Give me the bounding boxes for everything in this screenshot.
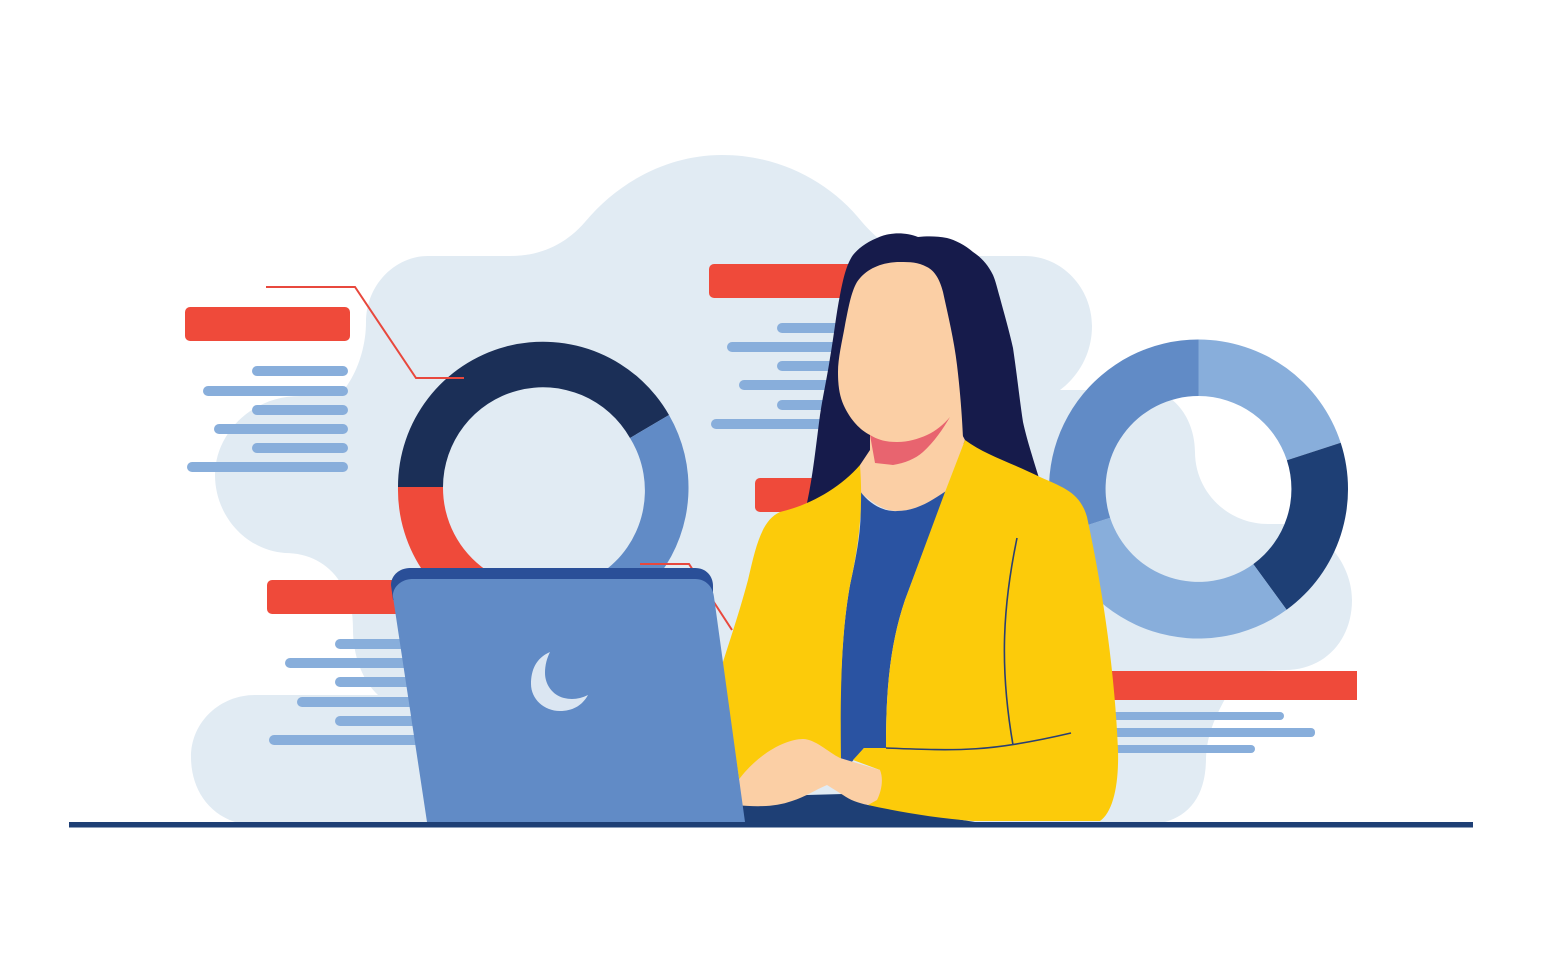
label group: lower left bbox=[267, 580, 432, 745]
icon: laptop logo bbox=[531, 652, 588, 711]
background blob bbox=[191, 155, 1352, 822]
label group: lower right bbox=[1100, 671, 1357, 753]
ground line bbox=[69, 822, 1473, 828]
label group: top centre bbox=[709, 264, 874, 429]
hand bbox=[735, 739, 882, 806]
neck shadow bbox=[870, 417, 950, 465]
jacket: left panel bbox=[722, 465, 861, 785]
jacket: right panel bbox=[853, 440, 1118, 821]
red connector line by laptop bbox=[640, 564, 732, 630]
label group: top left bbox=[185, 307, 350, 472]
blouse bbox=[840, 491, 946, 764]
neck bbox=[860, 412, 965, 511]
red connector line top left bbox=[266, 287, 464, 378]
hair bbox=[807, 233, 1039, 503]
jacket seams bbox=[886, 538, 1071, 750]
person bbox=[722, 233, 1118, 822]
red label behind figure bbox=[755, 478, 835, 512]
laptop bbox=[391, 568, 745, 822]
dark laptop base bbox=[735, 794, 975, 822]
face bbox=[838, 262, 963, 442]
left donut chart bbox=[398, 342, 689, 574]
right donut chart bbox=[1049, 340, 1348, 639]
